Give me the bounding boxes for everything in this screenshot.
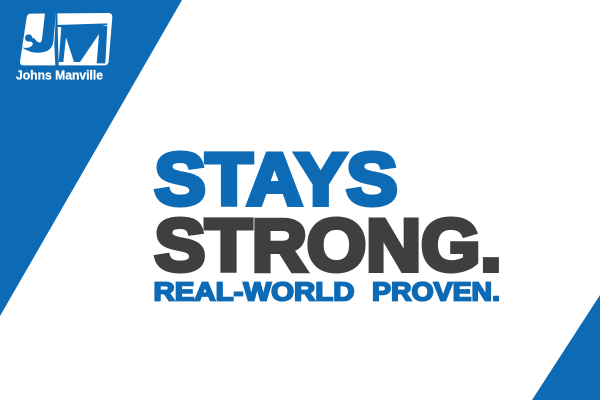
tagline: REAL-WORLD PROVEN.: [154, 278, 500, 306]
tagline: REAL-WORLD PROVEN.: PROVEN.: [372, 278, 500, 306]
bottom-right blue diagonal panel: [532, 295, 600, 400]
headline: STRONG.: STRONG.: [154, 206, 502, 286]
logo mark: JM: [20, 13, 112, 66]
tagline: REAL-WORLD PROVEN.: REAL-WORLD: [154, 278, 354, 306]
Johns Manville logo: [16, 13, 112, 82]
top-left blue diagonal panel: [0, 0, 182, 316]
logo wordmark: Johns Manville: [16, 68, 103, 82]
headline: STAYS: STAYS: [154, 140, 398, 220]
